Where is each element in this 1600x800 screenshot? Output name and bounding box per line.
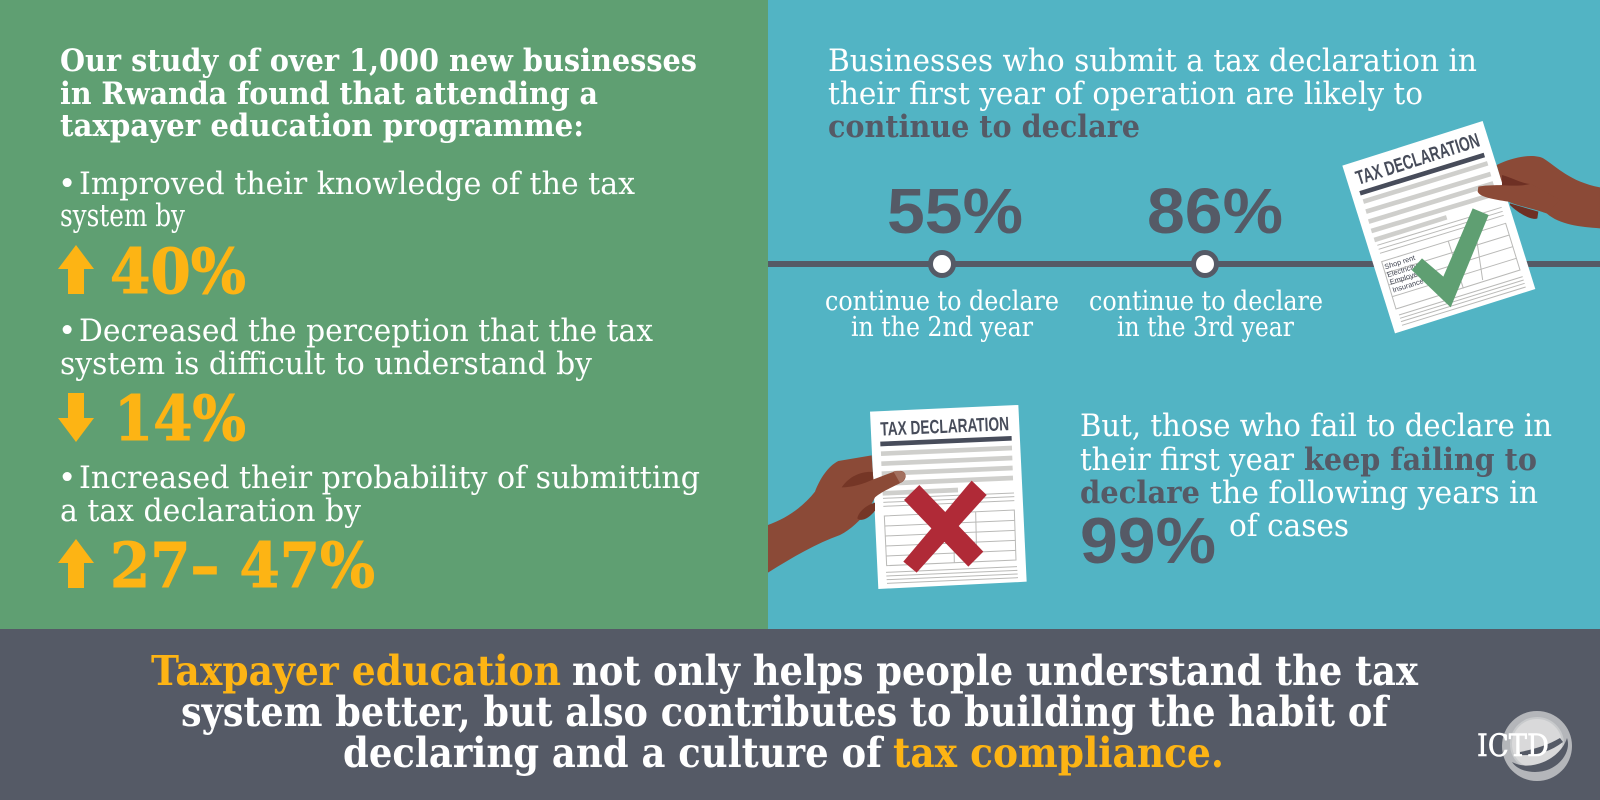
icon: hand holding rejected tax declaration: TAX DECLARATION — [880, 414, 1009, 441]
text: knowledge finding: Improved their knowledge of the tax — [79, 166, 635, 202]
stat: 14 percent: 14% — [114, 382, 246, 455]
label: 2nd year — [825, 286, 1059, 343]
icon: up arrow — [58, 539, 94, 588]
text: persistence intro: their first year of operation are likely to — [828, 76, 1423, 112]
heading: study intro: taxpayer education programme: — [60, 108, 584, 144]
stat: 86 percent — [1089, 175, 1323, 343]
text: declaration finding: Increased their probability of submitting — [79, 460, 700, 496]
text: declaration finding: a tax declaration by — [60, 493, 361, 529]
icon: hand holding approved tax declaration: Insurance — [1391, 276, 1425, 295]
stat: 86 percent: 86% — [1147, 175, 1283, 247]
stat: 55 percent: 55% — [887, 175, 1023, 247]
text: failure to declare: the following years in — [1210, 475, 1538, 511]
heading: study intro: in Rwanda found that attending a — [60, 76, 598, 112]
text: conclusion — [151, 647, 1418, 777]
text: persistence intro — [828, 43, 1477, 145]
stat: 40 percent: 40% — [110, 235, 246, 308]
label: 3rd year — [1089, 286, 1323, 343]
text: conclusion: system better, but also contributes to building the habit of — [181, 688, 1390, 736]
text: failure to declare — [1080, 408, 1552, 544]
label: 2nd year: in the 2nd year — [851, 312, 1033, 343]
timeline marker: 3rd year — [1194, 252, 1216, 276]
text: declaration finding — [58, 460, 700, 529]
icon: hand holding approved tax declaration: TAX DECLARATION — [1353, 130, 1482, 190]
text: knowledge finding — [58, 166, 635, 234]
label: 2nd year: continue to declare — [825, 286, 1059, 317]
label: 3rd year: continue to declare — [1089, 286, 1323, 317]
text: conclusion: declaring and a culture of — [343, 729, 884, 777]
text: perception finding: Decreased the perception that the tax — [79, 313, 653, 349]
icon: hand holding rejected tax declaration — [768, 405, 1027, 589]
text: declaration finding: • — [58, 460, 76, 496]
text: persistence intro: continue to declare — [828, 109, 1140, 145]
text: persistence intro: Businesses who submit a tax declaration in — [828, 43, 1477, 79]
text: failure to declare: their first year — [1080, 442, 1294, 478]
heading: study intro — [60, 43, 697, 144]
timeline marker: 2nd year — [930, 252, 954, 276]
icon: hand holding approved tax declaration: Shop rent — [1383, 253, 1416, 271]
panel: teal declaration persistence — [768, 0, 1600, 629]
panel: conclusion banner — [0, 629, 1600, 800]
label: 3rd year: in the 3rd year — [1117, 312, 1294, 343]
text: knowledge finding: • — [58, 166, 76, 202]
icon: hand holding approved tax declaration — [1342, 121, 1600, 333]
text: failure to declare: of cases — [1229, 508, 1349, 544]
text: failure to declare: But, those who fail to declare in — [1080, 408, 1552, 444]
logo: ICTD: ICTD — [1477, 728, 1549, 764]
text: failure to declare: declare — [1080, 475, 1200, 511]
timeline line — [768, 261, 1600, 267]
text: perception finding — [58, 313, 653, 382]
text: conclusion: tax compliance. — [893, 729, 1224, 777]
panel: green study findings — [0, 0, 768, 629]
logo: ICTD — [1477, 711, 1572, 781]
text: conclusion: not only helps people understand the tax — [572, 647, 1418, 695]
icon: hand holding approved tax declaration: Electricity — [1386, 261, 1419, 279]
stat: 99 percent: 99% — [1080, 504, 1216, 577]
text: failure to declare: keep failing to — [1304, 442, 1537, 478]
stat: 55 percent — [825, 175, 1059, 343]
stat: 27 to 47 percent: 27– 47% — [110, 529, 375, 602]
text: perception finding: • — [58, 313, 76, 349]
heading: study intro: Our study of over 1,000 new businesses — [60, 43, 697, 79]
text: knowledge finding: system by — [60, 198, 185, 234]
icon: hand holding approved tax declaration: Employees — [1389, 267, 1426, 287]
text: perception finding: system is difficult to understand by — [60, 346, 592, 382]
icon: up arrow — [58, 245, 94, 294]
icon: down arrow — [58, 393, 94, 442]
text: conclusion: Taxpayer education — [151, 647, 561, 695]
